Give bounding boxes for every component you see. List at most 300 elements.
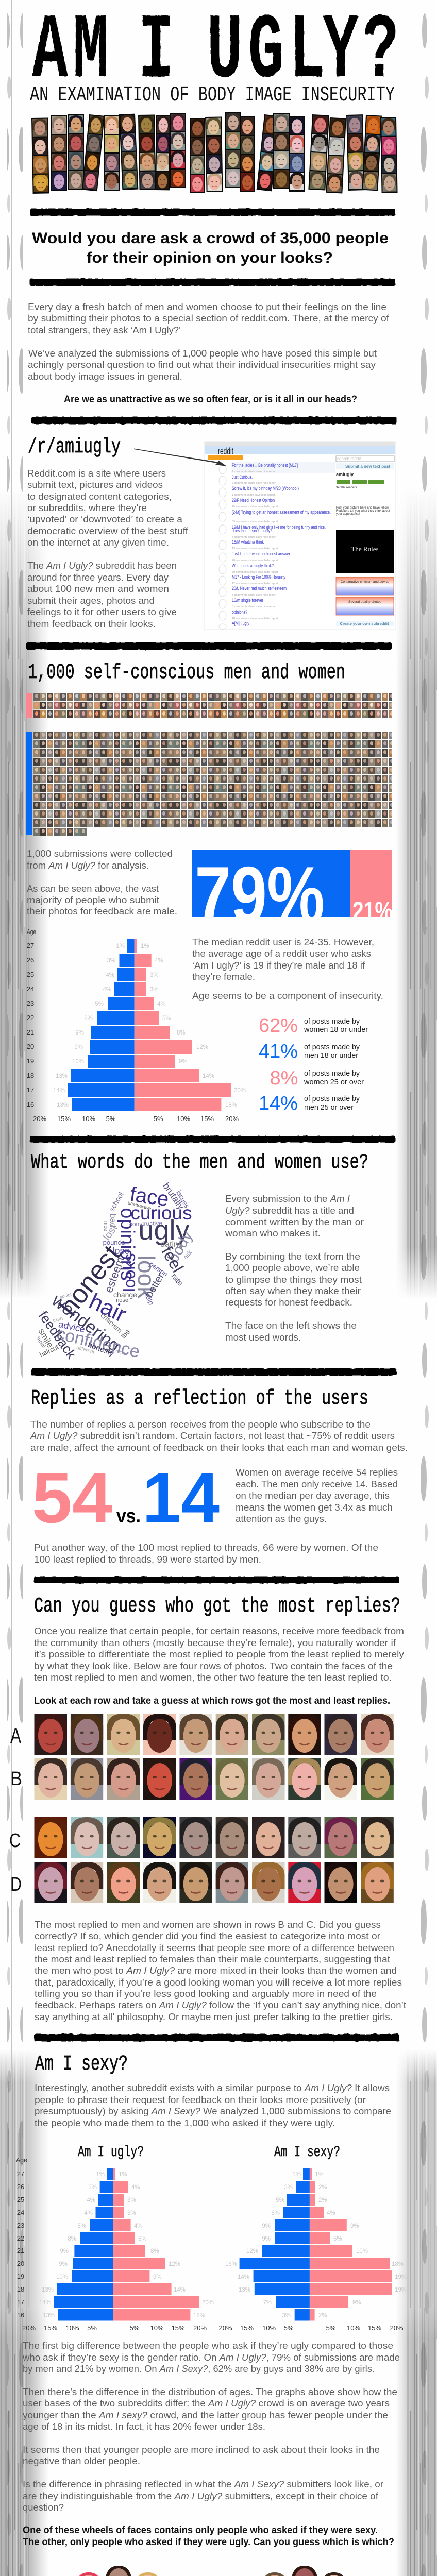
- age pyramid: am i ugly: 12%: [169, 2261, 180, 2267]
- word cloud face: school: [108, 1191, 125, 1213]
- age pyramid: am i sexy: 1%: [292, 2172, 301, 2178]
- age pyramid: all submissions: 9%: [74, 1044, 83, 1050]
- age pyramid: am i sexy: [218, 2144, 407, 2332]
- age pyramid: am i sexy: 1%: [315, 2172, 324, 2178]
- text: am i sexy intro: the people who made them to the 1,000 who asked if they were ugly.: [35, 2117, 335, 2128]
- reddit screenshot: 18 comments share save hide report: [232, 617, 278, 620]
- word cloud face: mirror: [115, 1348, 128, 1357]
- face row D: [34, 1862, 394, 1903]
- word cloud face: opinions: [116, 1208, 138, 1281]
- age pyramid: am i sexy: 9%: [262, 2236, 271, 2242]
- text: most replied threads: 100 least replied to threads, 99 were started by men.: [34, 1554, 261, 1565]
- age stat: 62%: [259, 1015, 368, 1037]
- age pyramid: am i ugly: 5%: [130, 2324, 140, 2332]
- age pyramid: all submissions: 14%: [203, 1073, 214, 1079]
- age pyramid: all submissions: 10%: [72, 1059, 84, 1065]
- text: guessing intro: the community than others (mostly because they’re female), you naturally wonder if: [34, 1637, 396, 1648]
- word cloud face: look: [133, 1255, 160, 1299]
- age pyramid: all submissions: 23: [27, 999, 34, 1007]
- age pyramid: am i ugly: 18: [17, 2285, 24, 2293]
- paragraph: what reddit is: democratic overview of the best stuff: [27, 526, 189, 536]
- text: am i sexy intro: [35, 2082, 391, 2128]
- word cloud face: face: [128, 1183, 170, 1211]
- age pyramid: am i ugly: 20: [17, 2260, 24, 2267]
- word cloud face: bad: [108, 1214, 117, 1227]
- age pyramid: all submissions: 9%: [179, 1059, 188, 1065]
- age stat: 14%: of posts made by: [304, 1094, 360, 1103]
- text: phrasing question: question?: [23, 2502, 64, 2513]
- thumbnail grid: women: [26, 693, 392, 718]
- age stat: 41%: [259, 1041, 360, 1062]
- text: guessing answer: The most replied to men and women are shown in rows B and C. Did you guess: [35, 1919, 381, 1930]
- age pyramid: am i ugly: 22: [17, 2234, 24, 2242]
- age pyramid: am i sexy: 5%: [284, 2324, 294, 2332]
- age pyramid: am i sexy: 6%: [271, 2210, 280, 2216]
- age stat: 14%: [259, 1093, 360, 1114]
- word cloud face: different: [76, 1345, 95, 1355]
- age stat: 8%: of posts made by: [304, 1069, 360, 1078]
- text: replies comparison: each. The men only receive 14. Based: [236, 1479, 398, 1489]
- word cloud face: criticism: [99, 1311, 124, 1334]
- gender share block: 79% / 21%: [192, 850, 392, 917]
- age pyramid: am i ugly: 18%: [193, 2313, 205, 2319]
- reddit screenshot: 13 comments share save hide report: [232, 547, 278, 550]
- text: age distribution difference: younger than the Am I sexy? crowd, and the latter group has fewer people under the: [23, 2410, 388, 2420]
- paragraph: what reddit is: on the internet at any given time.: [27, 537, 169, 548]
- gender share block: 79% / 21%: 79%: [195, 850, 325, 939]
- age pyramid: am i ugly: 9%: [153, 2274, 162, 2280]
- paragraph: what reddit is: or subreddits, where they’re: [27, 502, 147, 513]
- age pyramid: am i ugly: 4%: [84, 2210, 93, 2216]
- age pyramid: all submissions: 4%: [155, 958, 163, 964]
- age pyramid: am i ugly: 13%: [42, 2287, 54, 2293]
- word cloud face: body: [164, 1228, 196, 1266]
- text: word cloud explanation: often say when they make their: [225, 1285, 361, 1296]
- text: am i sexy intro: presumptuously) by asking Am I Sexy? We analyzed 1,000 submissions to compare: [35, 2106, 391, 2116]
- reddit screenshot: amiugly: [336, 472, 354, 477]
- header face mosaic: [31, 112, 398, 194]
- age stat: 41%: of posts made by: [304, 1043, 360, 1052]
- age pyramid: am i ugly: 15%: [44, 2324, 57, 2332]
- bold: wheels prompt: The other, only people who asked if they were ugly. Can you guess which is which?: [23, 2537, 394, 2548]
- reddit screenshot: 79 comments share save hide report: [232, 571, 278, 574]
- face row A: [34, 1714, 394, 1755]
- age pyramid: am i ugly: Am I ugly?: [78, 2144, 144, 2161]
- age pyramid: all submissions: 20: [27, 1043, 34, 1050]
- age pyramid: all submissions: 15%: [57, 1115, 71, 1123]
- word cloud face: curious: [130, 1202, 192, 1224]
- age pyramid: am i ugly: 20%: [202, 2300, 214, 2306]
- paragraph: what reddit is: submit text, pictures and videos: [27, 479, 163, 490]
- text: word cloud explanation: By combining the text from the: [225, 1251, 360, 1262]
- age pyramid: am i sexy: 18%: [392, 2261, 404, 2267]
- age pyramid: am i ugly: 14%: [39, 2300, 51, 2306]
- age stat: 62%: women 18 or under: [304, 1025, 368, 1034]
- text: word cloud explanation: comment written by the man or: [225, 1216, 364, 1227]
- intro paragraph 1: Every day a fresh batch of men and women choose to put their feelings on the line: [28, 301, 386, 312]
- age pyramid: am i sexy: 9%: [352, 2300, 361, 2306]
- age pyramid: am i ugly: [16, 2144, 214, 2332]
- text: submissions collected: [27, 848, 177, 917]
- age pyramid: all submissions: 1%: [116, 943, 125, 950]
- age pyramid: am i sexy: 14%: [238, 2274, 249, 2280]
- text: phrasing question: Is the difference in phrasing reflected in what the Am I Sexy? submitters look like, or: [23, 2479, 383, 2489]
- word cloud face: nice: [103, 1221, 109, 1231]
- text: median age: Age seems to be a component of insecurity.: [192, 990, 383, 1001]
- age stat: 62%: of posts made by: [304, 1017, 360, 1026]
- text: age distribution difference: Then there’s the difference in the distribution of ages. The graphs above show how the: [23, 2386, 397, 2397]
- age pyramid: all submissions: 5%: [95, 1001, 104, 1007]
- age pyramid: am i sexy: 19%: [395, 2287, 407, 2293]
- word cloud face: help: [143, 1291, 156, 1306]
- text: guessing answer: say anything at all’ philosophy. Or maybe men just prefer talking to the prettier girls.: [35, 2011, 393, 2022]
- row label D: D: [10, 1874, 22, 1895]
- paragraph: what reddit is: Reddit.com is a site where users: [27, 468, 166, 479]
- heading: /r/amiugly: /r/amiugly: [28, 435, 121, 459]
- word cloud face: constructive: [129, 1219, 162, 1228]
- paragraph: the subreddit: feelings to it for other users to give: [27, 606, 177, 617]
- reddit screenshot: does that mean I’m ugly?: [232, 528, 272, 533]
- age pyramid: am i ugly: 9%: [59, 2261, 68, 2267]
- age stat: 41%: 41%: [259, 1041, 298, 1062]
- age pyramid: am i ugly: 3%: [127, 2210, 136, 2216]
- text: age distribution difference: [23, 2386, 397, 2432]
- age pyramid: am i ugly: 5%: [87, 2324, 97, 2332]
- reddit screenshot: 3 comments share save hide report: [232, 594, 277, 597]
- age pyramid: all submissions: 20%: [33, 1115, 46, 1123]
- face row B: [34, 1758, 394, 1800]
- age pyramid: am i ugly: 26: [17, 2183, 24, 2191]
- reddit screenshot: reddit: [218, 446, 233, 456]
- text: younger people: It seems then that younger people are more inclined to ask about their looks in the: [23, 2444, 380, 2455]
- age pyramid: all submissions: 3%: [107, 958, 115, 964]
- age pyramid: all submissions: 13%: [56, 1073, 68, 1079]
- word cloud face: feedback: [36, 1308, 79, 1362]
- age pyramid: am i ugly: 5%: [138, 2236, 147, 2242]
- big numbers: 54 vs. 14: 14: [142, 1458, 220, 1538]
- age stat: 41%: men 18 or under: [304, 1051, 358, 1060]
- gender share block: 79% / 21%: 21%: [352, 896, 393, 925]
- big numbers: 54 vs. 14: vs.: [116, 1505, 141, 1527]
- paragraph: the subreddit: around for three years. Every day: [27, 572, 169, 583]
- reddit screenshot: 1 comment share save hide report: [232, 494, 275, 497]
- text: most replied threads: Put another way, of the 100 most replied to threads, 66 were by women. Of the: [34, 1542, 378, 1553]
- age pyramid: am i ugly: 4%: [87, 2197, 95, 2204]
- age pyramid: all submissions: 5%: [162, 1015, 171, 1022]
- age pyramid: am i ugly: 8%: [150, 2248, 159, 2255]
- word cloud face: ask: [182, 1248, 194, 1261]
- row label A: A: [10, 1723, 21, 1748]
- bold question: Are we as unattractive as we so often fear, or is it all in our heads?: [64, 394, 357, 405]
- reddit screenshot: [24/f] Trying to get an honest assessment of my appearance.: [232, 510, 331, 515]
- age pyramid: am i sexy: 19%: [395, 2274, 407, 2280]
- age pyramid: am i sexy: 10%: [347, 2324, 360, 2332]
- age pyramid: am i ugly: 10%: [150, 2324, 164, 2332]
- reddit screenshot: 12 comments share save hide report: [232, 582, 278, 585]
- reddit screenshot: 69 comments share save hide report: [232, 520, 278, 523]
- age pyramid: am i ugly: 25: [17, 2196, 24, 2204]
- age pyramid: am i sexy: 9%: [262, 2223, 271, 2229]
- text: gender ratio difference: The first big difference between the people who ask if they’re ugly compared to those: [23, 2340, 393, 2351]
- intro paragraph 1: by submitting their photos to a special section of reddit.com. There, at the mercy of: [28, 313, 390, 324]
- paragraph: the subreddit: submit their ages, photos and: [27, 595, 155, 606]
- word cloud face: better: [143, 1271, 166, 1300]
- age pyramid: all submissions: 18: [27, 1072, 34, 1079]
- age pyramid: am i ugly: 17: [17, 2298, 24, 2306]
- age pyramid: am i sexy: 16%: [225, 2261, 237, 2267]
- age pyramid: am i sexy: Am I sexy?: [274, 2144, 340, 2161]
- text: younger people: [23, 2444, 380, 2466]
- paragraph: what reddit is: to designated content categories,: [27, 491, 172, 502]
- reddit screenshot: Screw it, it’s my birthday M/20 (Woohoo!): [232, 486, 299, 491]
- age pyramid: am i ugly: 1%: [96, 2172, 105, 2178]
- text: most replied threads: [34, 1542, 378, 1565]
- text: gender ratio difference: [22, 2340, 400, 2374]
- age pyramid: all submissions: 13%: [57, 1102, 69, 1108]
- age pyramid: all submissions: 1%: [141, 943, 149, 950]
- age pyramid: am i ugly: 14%: [174, 2287, 186, 2293]
- age pyramid: am i ugly: 8%: [68, 2236, 76, 2242]
- age pyramid: am i ugly: Age: [16, 2156, 27, 2164]
- word cloud face: lost: [101, 1223, 120, 1243]
- text: word cloud explanation: most used words.: [225, 1332, 301, 1343]
- age pyramid: am i ugly: 19: [17, 2273, 24, 2280]
- age pyramid: all submissions: 15%: [200, 1115, 214, 1123]
- text: guessing intro: it’s possible to differentiate the most replied to people from the least replied to merely: [34, 1649, 405, 1659]
- age pyramid: am i ugly: 15%: [172, 2324, 185, 2332]
- word cloud face: dating: [160, 1240, 183, 1249]
- title: AM I UGLY?: [32, 0, 399, 105]
- text: word cloud explanation: requests for honest feedback.: [225, 1297, 352, 1308]
- age pyramid: all submissions: 20%: [225, 1115, 239, 1123]
- text: replies intro: Am I Ugly? subreddit isn’t random. Certain factors, not least that ~75% of reddit users: [30, 1430, 395, 1441]
- age pyramid: am i sexy: 10%: [356, 2248, 368, 2255]
- reddit screenshot: [205, 442, 395, 630]
- age pyramid: am i sexy: 5%: [333, 2236, 342, 2242]
- reddit screenshot: 25 comments share save hide report: [232, 505, 278, 509]
- paragraph: the subreddit: about 100 new men and women: [27, 583, 169, 594]
- intro question heading: Would you dare ask a crowd of 35,000 people: [32, 230, 389, 247]
- age pyramid: am i ugly: 27: [17, 2170, 24, 2178]
- paragraph: what reddit is: ‘upvoted’ or ‘downvoted’ to create a: [27, 514, 183, 524]
- thumbnail grid: men: [26, 732, 392, 836]
- age pyramid: am i sexy: 20%: [390, 2324, 404, 2332]
- age pyramid: all submissions: 17: [27, 1086, 34, 1094]
- big numbers: 54 vs. 14: [32, 1458, 220, 1538]
- age pyramid: am i sexy: 20%: [218, 2324, 232, 2332]
- age pyramid: am i ugly: 20%: [193, 2324, 207, 2332]
- reddit screenshot: Constructive criticism and advice: [341, 580, 390, 584]
- text: submissions collected: majority of people who submit: [27, 894, 159, 905]
- word cloud face: advice: [58, 1319, 86, 1334]
- reddit screenshot: A[M] I ugly: [232, 621, 249, 626]
- word cloud face: wondering: [47, 1290, 124, 1356]
- reddit screenshot: 16/m single forever: [232, 598, 263, 603]
- reddit screenshot: M17 - Looking For 100% Honesty: [232, 574, 285, 580]
- text: replies intro: The number of replies a person receives from the people who subscribe to the: [30, 1419, 371, 1430]
- age stat: 14%: men 25 or over: [304, 1103, 354, 1112]
- age pyramid: all submissions: 3%: [150, 972, 159, 978]
- word cloud face: lbs: [119, 1328, 131, 1340]
- age pyramid: am i ugly: 21: [17, 2247, 24, 2255]
- text: guessing intro: ten most replied to men and women, the other two feature the ten least replied to.: [34, 1672, 392, 1683]
- reddit screenshot: 34,902 readers: [336, 486, 357, 489]
- text: am i sexy intro: people to phrase their request for feedback on their looks more positively (or: [35, 2094, 366, 2105]
- intro paragraph 1: total strangers, they ask ‘Am I Ugly?’: [28, 325, 181, 335]
- text: median age: The median reddit user is 24-35. However,: [192, 937, 374, 947]
- reddit screenshot: 19/M I have only had girls like me for being funny and nice,: [232, 524, 326, 530]
- text: replies intro: are male, affect the amount of feedback on their looks that each man and woman gets.: [30, 1442, 408, 1453]
- text: submissions collected: 1,000 submissions were collected: [27, 848, 173, 859]
- word cloud face: hair: [86, 1289, 130, 1328]
- word cloud face: social: [59, 1292, 72, 1300]
- face wheel A: [39, 2566, 198, 2576]
- text: word cloud explanation: [225, 1193, 364, 1343]
- text: guessing intro: by what they look like. Below are four rows of photos. Two contain the faces of the: [34, 1660, 393, 1671]
- age pyramid: am i sexy: 3%: [284, 2184, 293, 2191]
- age pyramid: all submissions: 20%: [234, 1088, 246, 1094]
- age pyramid: all submissions: 19: [27, 1057, 34, 1065]
- reddit screenshot: Several quality photos: [348, 600, 382, 604]
- intro paragraph 2: about body image issues in general.: [28, 371, 182, 382]
- text: replies intro: [30, 1419, 408, 1453]
- word cloud face: lose: [112, 1246, 130, 1256]
- intro paragraph 2: [28, 348, 377, 382]
- age pyramid: am i ugly: 10%: [66, 2324, 79, 2332]
- text: guessing answer: least replied to? Anecdotally it seems that people see more of a difference between: [35, 1942, 394, 1953]
- reddit screenshot: 18/M whatcha think: [232, 539, 264, 545]
- age pyramid: all submissions: 25: [27, 971, 34, 978]
- word cloud face: esteem: [102, 1255, 127, 1295]
- age pyramid: all submissions: 18%: [225, 1102, 237, 1108]
- age pyramid: all submissions: 27: [27, 942, 34, 950]
- age pyramid: am i ugly: 4%: [131, 2184, 140, 2191]
- text: word cloud explanation: Every submission to the Am I: [225, 1193, 350, 1204]
- text: submissions collected: from Am I Ugly? for analysis.: [27, 860, 149, 871]
- text: median age: the average age of a reddit user who asks: [192, 948, 371, 959]
- text: phrasing question: are they indistinguishable from the Am I Ugly? submitters, except in their choice of: [23, 2490, 379, 2501]
- text: median age: ‘Am I ugly?’ is 19 if they’re male and 18 if: [192, 960, 365, 971]
- age pyramid: am i sexy: 9%: [350, 2223, 359, 2229]
- age pyramid: am i sexy: 12%: [246, 2248, 258, 2255]
- text: younger people: negative than older people.: [23, 2455, 140, 2466]
- age pyramid: all submissions: 5%: [154, 1115, 163, 1123]
- age pyramid: am i sexy: 2%: [318, 2197, 327, 2204]
- age pyramid: am i ugly: 4%: [134, 2223, 143, 2229]
- paragraph: what reddit is: [27, 468, 189, 548]
- reddit screenshot: Just Curious.: [232, 474, 253, 480]
- text: word cloud explanation: 1,000 people above, we’re able: [225, 1262, 360, 1273]
- text: word cloud explanation: woman who makes it.: [225, 1228, 321, 1239]
- reddit screenshot: 7 comments share save hide report: [232, 470, 277, 473]
- age pyramid: all submissions: 14%: [53, 1088, 65, 1094]
- bold: wheels prompt: One of these wheels of faces contains only people who asked if they were sexy.: [23, 2525, 378, 2536]
- text: guessing answer: [35, 1919, 406, 2022]
- age pyramid: am i sexy: 5%: [326, 2324, 336, 2332]
- age pyramid: am i ugly: 5%: [77, 2223, 86, 2229]
- word cloud face: haircut: [38, 1343, 60, 1359]
- word cloud face: brutally: [161, 1181, 187, 1211]
- age pyramid: all submissions: 21: [27, 1028, 34, 1036]
- age stat: 14%: 14%: [259, 1093, 298, 1114]
- text: guessing answer: the men who post to Am I Ugly? are more mixed in their looks than the women and: [35, 1965, 397, 1976]
- text: gender ratio difference: by men and 21% by women. On Am I Sexy?, 62% are by guys and 38% are by girls.: [23, 2363, 375, 2374]
- age pyramid: am i sexy: 7%: [263, 2300, 272, 2306]
- text: word cloud explanation: Ugly? subreddit has a title and: [225, 1205, 354, 1216]
- text: replies comparison: Women on average receive 54 replies: [236, 1467, 398, 1478]
- text: phrasing question: [23, 2479, 383, 2513]
- reddit screenshot: For the ladies... Be brutally honest [M17]: [232, 463, 298, 468]
- reddit screenshot: Post your picture here and have fellow: [336, 506, 389, 510]
- age stat: 8%: 8%: [270, 1067, 298, 1089]
- text: guessing intro: [34, 1625, 405, 1683]
- age pyramid: am i ugly: 24: [17, 2209, 24, 2216]
- age pyramid: all submissions: Age: [27, 928, 36, 936]
- reddit screenshot: Create your own subreddit: [340, 621, 389, 626]
- age pyramid: am i sexy: 10%: [262, 2324, 276, 2332]
- word cloud face: facial: [35, 1336, 46, 1349]
- text: guessing answer: telling you so than if you’re less good looking and arguably more in need of the: [35, 1988, 377, 1999]
- reddit screenshot: search reddit: [337, 456, 361, 461]
- reddit screenshot: opinions?: [232, 609, 247, 615]
- age pyramid: am i sexy: 3%: [282, 2313, 291, 2319]
- age pyramid: am i sexy: 5%: [276, 2197, 284, 2204]
- row label C: C: [9, 1830, 21, 1852]
- age stat: 8%: [270, 1067, 364, 1089]
- word cloud face: honesty: [87, 1341, 115, 1358]
- age pyramid: all submissions: 8%: [84, 1015, 93, 1022]
- text: replies comparison: on the median per day average, this: [236, 1490, 390, 1501]
- reddit screenshot: Redditors tell you what they think about: [336, 510, 390, 513]
- text: age distribution difference: age of 18 in its midst. In fact, it has 20% fewer under 18s.: [23, 2421, 265, 2432]
- text: gender ratio difference: who ask if they’re sexy is the gender ratio. On Am I Ugly?, 79% of submissions are made: [22, 2352, 400, 2363]
- age pyramid: all submissions: 3%: [150, 987, 159, 993]
- age pyramid: am i sexy: 2%: [318, 2184, 327, 2191]
- word cloud face: honest: [54, 1240, 127, 1321]
- word cloud face: rate: [170, 1272, 184, 1287]
- age pyramid: am i ugly: 1%: [119, 2172, 127, 2178]
- intro paragraph 2: We’ve analyzed the submissions of 1,000 people who have posed this simple but: [28, 348, 377, 359]
- age pyramid: am i sexy: 13%: [239, 2287, 250, 2293]
- age pyramid: am i ugly: 10%: [56, 2274, 68, 2280]
- row label B: B: [10, 1768, 22, 1790]
- reddit screenshot: 20 comments share save hide report: [232, 559, 278, 562]
- paragraph: the subreddit: The Am I Ugly? subreddit has been: [27, 560, 177, 571]
- age pyramid: all submissions: 26: [27, 956, 34, 964]
- age pyramid: all submissions: 9%: [75, 1030, 84, 1036]
- age pyramid: all submissions: 8%: [177, 1030, 186, 1036]
- word cloud face: nose: [116, 1297, 128, 1303]
- bold instruction: Look at each row and take a guess at which rows got the most and least replies.: [34, 1696, 390, 1706]
- word cloud face: pounds: [103, 1239, 125, 1246]
- age pyramid: am i sexy: 15%: [240, 2324, 254, 2332]
- age pyramid: all submissions: [27, 928, 246, 1123]
- text: word cloud explanation: The face on the left shows the: [225, 1320, 357, 1331]
- age pyramid: all submissions: 12%: [196, 1044, 208, 1050]
- text: guessing answer: that, paradoxically, if you’re a good looking woman you will receive a lot more replies: [35, 1977, 402, 1988]
- word cloud face: ugly: [138, 1215, 190, 1246]
- word cloud face: person: [148, 1260, 169, 1278]
- age pyramid: am i ugly: 16: [17, 2311, 24, 2319]
- intro question heading: [32, 230, 389, 266]
- text: replies comparison: [236, 1467, 398, 1524]
- word cloud face: issues: [175, 1189, 191, 1210]
- age pyramid: all submissions: 16: [27, 1100, 34, 1108]
- text: submissions collected: their photos for feedback are male.: [27, 906, 177, 917]
- intro paragraph 1: [28, 301, 390, 335]
- text: am i sexy intro: Interestingly, another subreddit exists with a similar purpose to Am I Ugly? It allows: [35, 2082, 390, 2093]
- text: replies comparison: means the women get 3.4x as much: [236, 1502, 393, 1513]
